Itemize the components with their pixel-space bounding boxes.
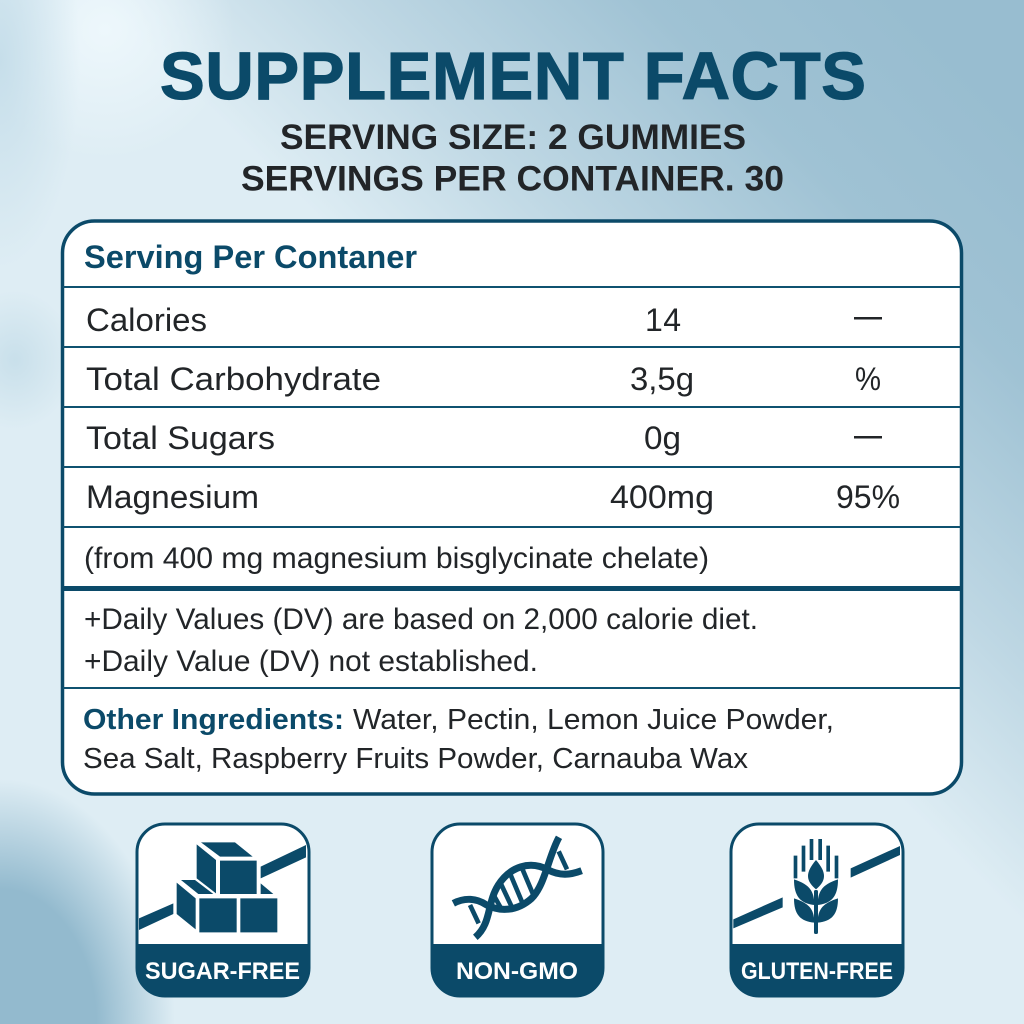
badge: sugar-free xyxy=(137,824,309,996)
table heading: Serving Per Contaner xyxy=(84,239,417,275)
other ingredients: Water, Pectin, Lemon Juice Powder, xyxy=(353,704,834,736)
row: magnesium: Magnesium xyxy=(86,479,259,515)
magnesium source note: (from 400 mg magnesium bisglycinate chelate) xyxy=(84,542,709,575)
other ingredients: Other Ingredients: xyxy=(83,704,344,736)
badge label: GLUTEN-FREE xyxy=(741,958,893,985)
icon: dna helix xyxy=(453,837,582,937)
row: total sugars: 0g xyxy=(644,420,681,456)
badge label: NON-GMO xyxy=(456,958,578,985)
badge label: SUGAR-FREE xyxy=(145,958,300,985)
row: calories: Calories xyxy=(86,302,207,338)
row: total sugars xyxy=(86,420,882,456)
icon: wheat xyxy=(733,839,900,934)
row: total carbohydrate: 3,5g xyxy=(630,361,694,397)
row: total sugars: Total Sugars xyxy=(86,420,275,456)
row: calories: 14 xyxy=(645,302,681,338)
servings per container line: SERVINGS PER CONTAINER. 30 xyxy=(241,160,784,198)
daily values notes: +Daily Values (DV) are based on 2,000 calorie diet. xyxy=(84,603,758,636)
row: total carbohydrate: Total Carbohydrate xyxy=(86,361,381,397)
serving size line: SERVING SIZE: 2 GUMMIES xyxy=(280,118,746,157)
row: total carbohydrate xyxy=(86,361,881,397)
daily values notes xyxy=(84,603,758,678)
other ingredients xyxy=(83,704,834,775)
badge: non-gmo xyxy=(432,824,603,996)
daily values notes: +Daily Value (DV) not established. xyxy=(84,645,538,678)
badge: gluten-free xyxy=(731,824,903,996)
icon: sugar cubes xyxy=(139,842,306,932)
row: magnesium xyxy=(86,479,900,515)
row: magnesium: 95% xyxy=(836,479,900,515)
row: magnesium: 400mg xyxy=(610,479,714,515)
row: total carbohydrate: % xyxy=(855,361,881,397)
row: calories xyxy=(86,302,882,338)
other ingredients: Sea Salt, Raspberry Fruits Powder, Carnauba Wax xyxy=(83,743,749,775)
title: SUPPLEMENT FACTS xyxy=(160,39,866,114)
panel: facts table xyxy=(62,221,962,794)
